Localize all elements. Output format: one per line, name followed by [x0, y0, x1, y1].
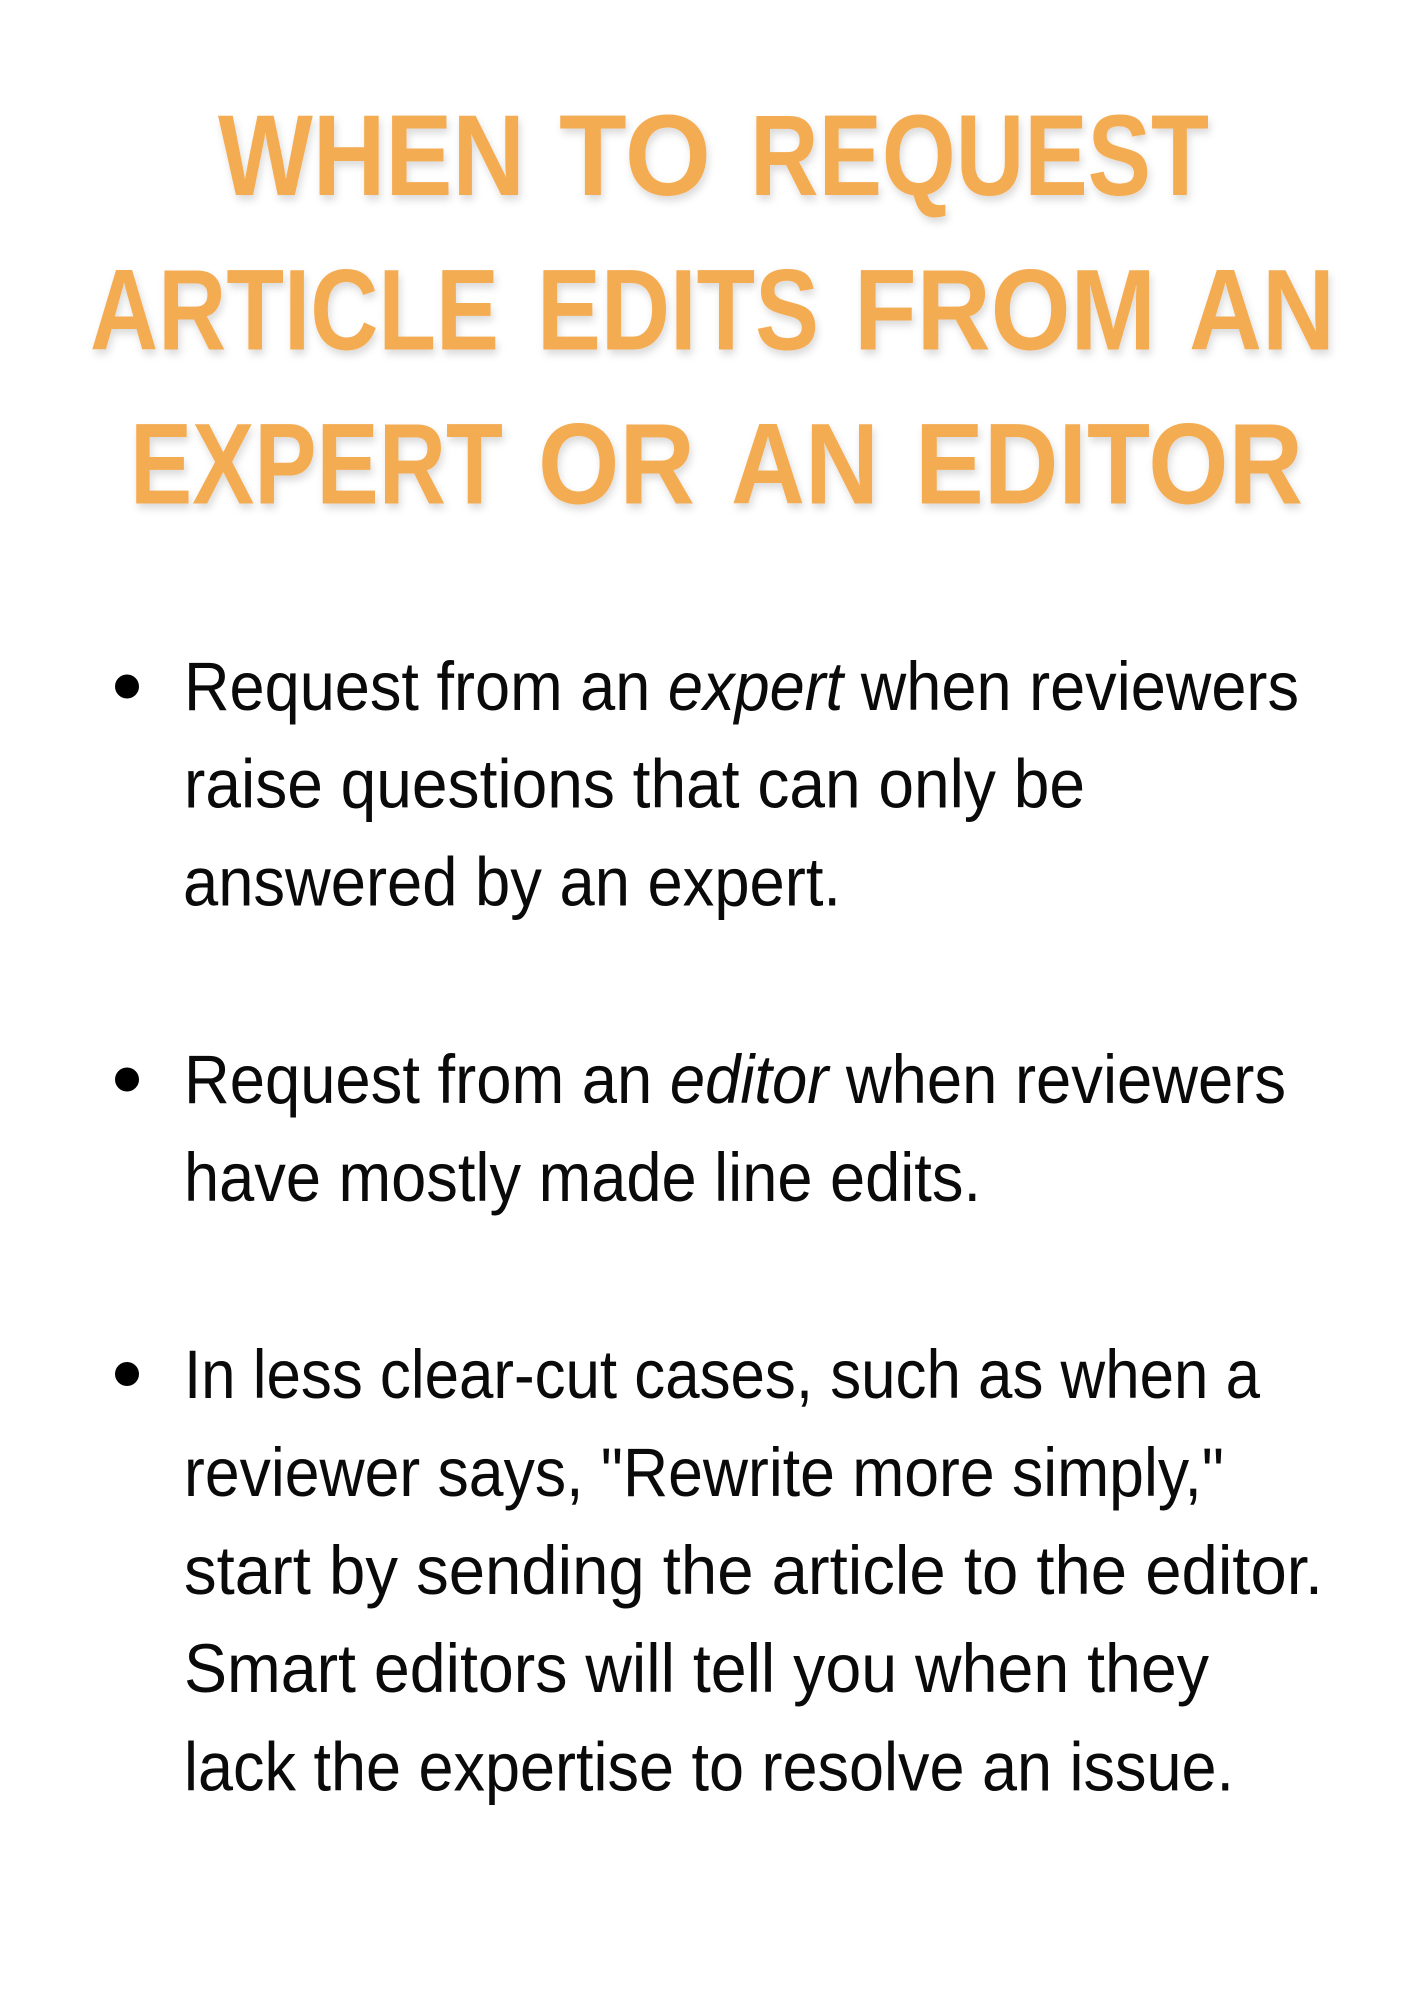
expert text block: Request from an expert when reviewers [184, 648, 1299, 725]
editor text block: have mostly made line edits. [184, 1139, 981, 1216]
bullet point: editor [115, 1041, 1286, 1216]
less clear-cut cases text block: reviewer says, "Rewrite more simply," [184, 1434, 1224, 1511]
editor text block: Request from an editor when reviewers [184, 1041, 1286, 1118]
title: WHEN [218, 92, 525, 220]
title: AN [731, 400, 879, 528]
title: REQUEST [750, 92, 1209, 220]
bullet marker [115, 1068, 139, 1092]
expert text block [183, 648, 1299, 920]
expert text block: raise questions that can only be [184, 746, 1085, 822]
title: AN [1189, 246, 1335, 374]
title: EDITS [537, 246, 819, 374]
editor text block [184, 1041, 1286, 1216]
title: ARTICLE [90, 246, 499, 374]
less clear-cut cases text block: lack the expertise to resolve an issue. [184, 1728, 1234, 1806]
title: EDITOR [915, 400, 1303, 528]
less clear-cut cases text block: In less clear-cut cases, such as when a [184, 1336, 1261, 1413]
bullet marker [115, 1362, 139, 1386]
bullet marker [115, 674, 139, 698]
title: FROM [854, 246, 1156, 374]
title: OR [538, 400, 695, 528]
title: EXPERT [130, 400, 503, 528]
less clear-cut cases text block: start by sending the article to the editor. [184, 1532, 1323, 1609]
expert text block: answered by an expert. [183, 844, 841, 920]
less clear-cut cases text block [184, 1336, 1323, 1806]
bullet point: less clear-cut cases [115, 1336, 1323, 1806]
title: TO [559, 92, 711, 220]
bullet point: expert [115, 648, 1299, 920]
title [90, 92, 1335, 528]
less clear-cut cases text block: Smart editors will tell you when they [184, 1630, 1209, 1707]
